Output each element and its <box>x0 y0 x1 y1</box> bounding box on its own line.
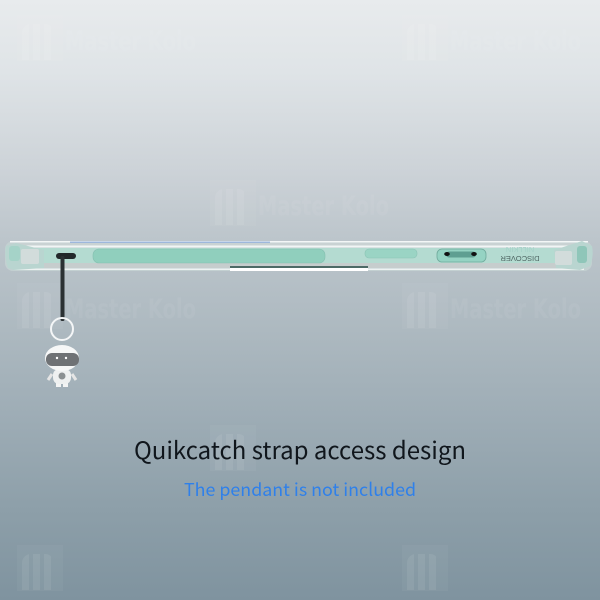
watermark: top right: Master Kolo <box>450 26 581 57</box>
case body <box>5 241 592 271</box>
watermark: bottom left <box>22 554 51 590</box>
case brand text: DISCOVER <box>500 254 540 263</box>
case brand text <box>500 245 540 263</box>
watermark: lower center <box>215 434 244 470</box>
note: The pendant is not included <box>184 476 416 502</box>
watermark: middle right <box>408 294 581 328</box>
watermark: top left: Master Kolo <box>65 26 196 57</box>
watermark: top left <box>17 15 207 65</box>
side button short <box>365 249 417 258</box>
case brand text: NILLKIN <box>506 245 534 254</box>
watermark: upper center <box>210 180 400 230</box>
pendant robot <box>45 345 79 387</box>
side button long <box>93 249 325 263</box>
strap <box>56 253 76 321</box>
watermark: middle left <box>23 294 196 328</box>
left corner bumper <box>5 243 44 270</box>
title: Quikcatch strap access design <box>134 431 466 466</box>
watermark: upper center: Master Kolo <box>258 191 389 222</box>
watermark: bottom right <box>407 554 436 590</box>
pendant ring <box>51 318 73 340</box>
watermark: top right <box>402 15 592 65</box>
watermark: middle right: Master Kolo <box>450 294 581 325</box>
speaker grille slot <box>437 249 486 262</box>
right corner bumper <box>554 241 593 270</box>
watermark: middle left: Master Kolo <box>65 294 196 325</box>
